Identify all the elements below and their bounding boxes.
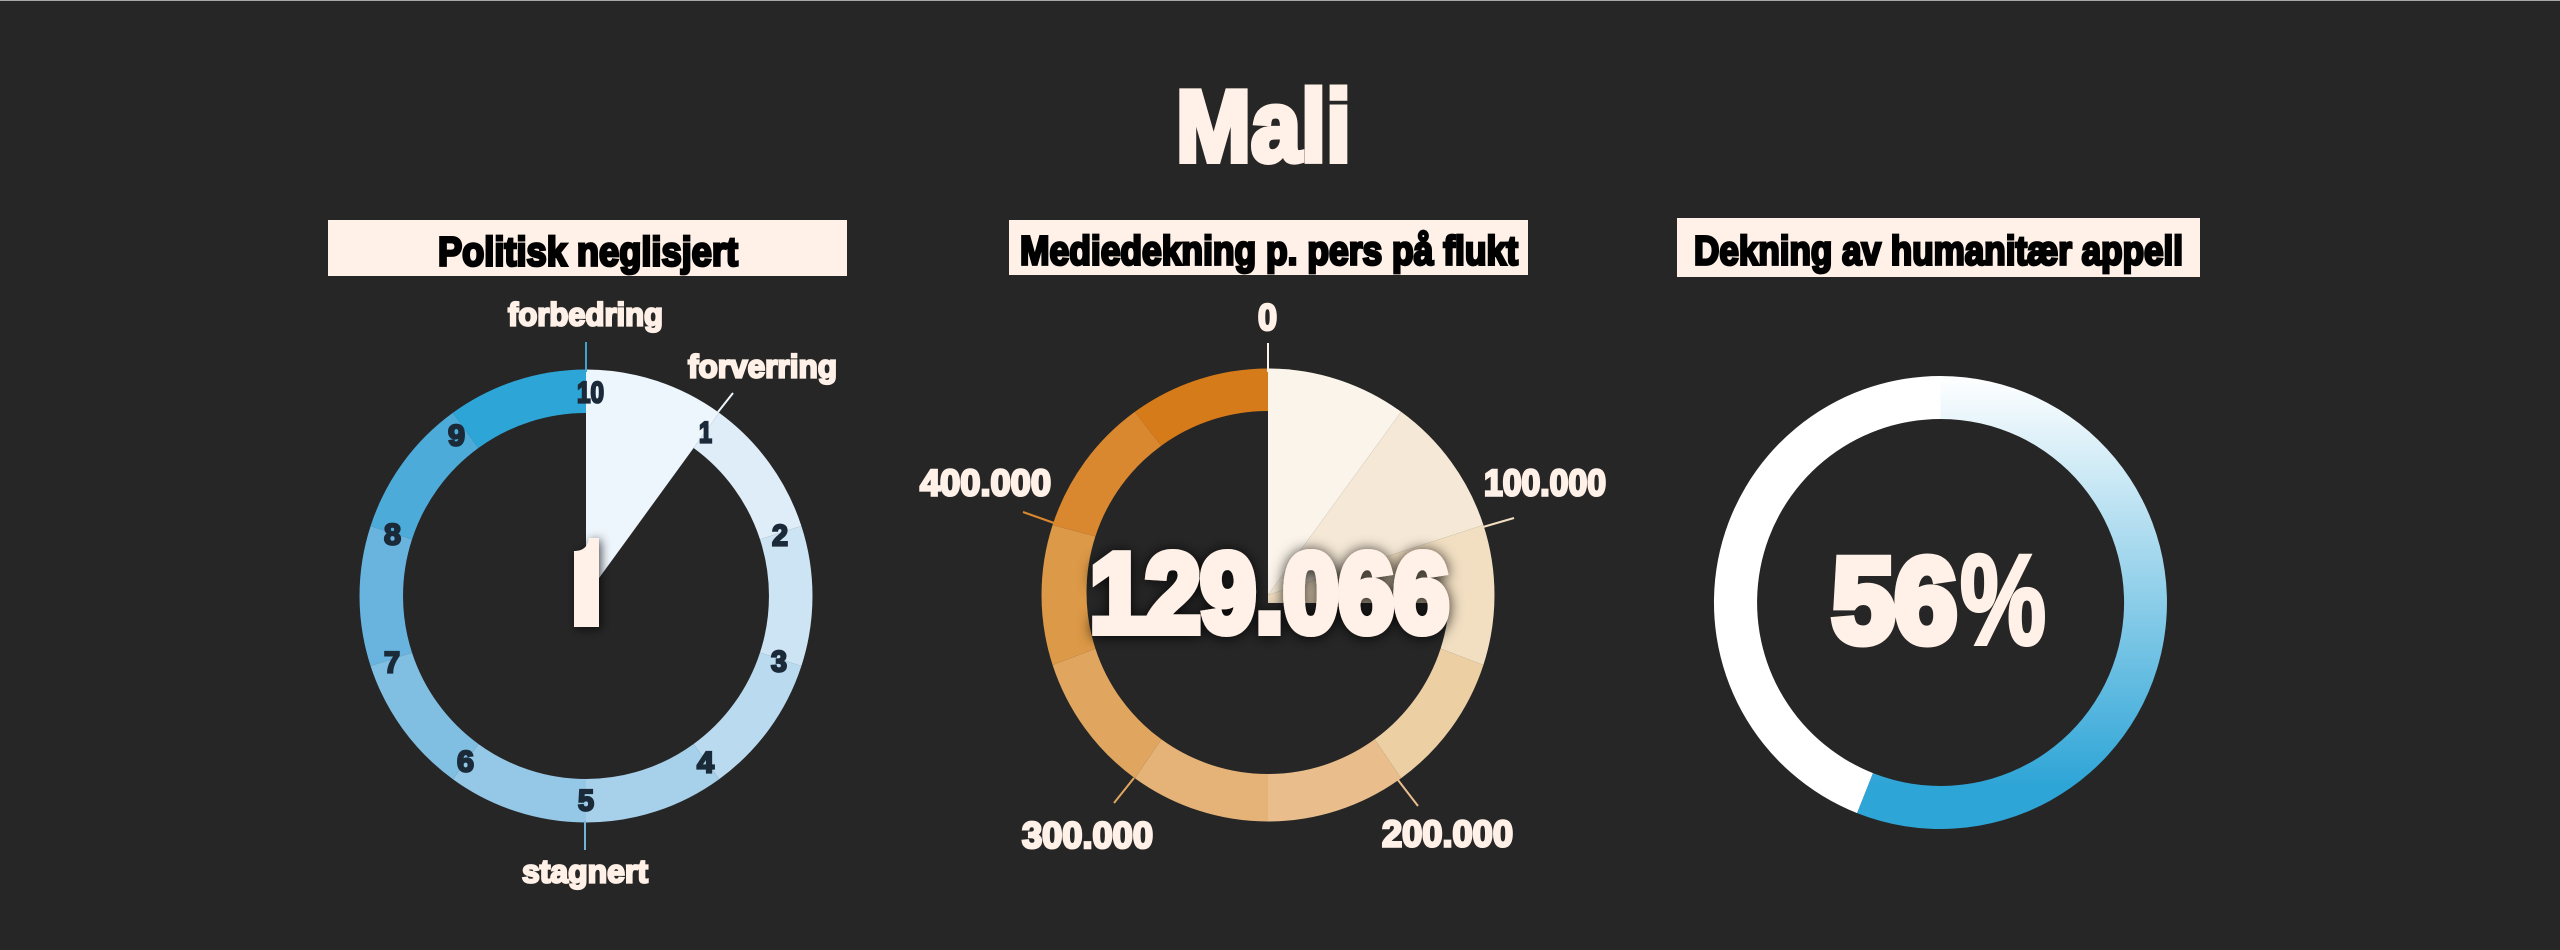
tick: 0	[1267, 343, 1269, 372]
scale numbers: 6	[457, 746, 474, 778]
label: forbedring: forbedring	[508, 296, 663, 332]
tick: stagnert	[584, 821, 586, 850]
label: 100.000: 100.000	[1484, 462, 1606, 504]
label: 200.000: 200.000	[1382, 814, 1513, 854]
scale numbers: 8	[384, 518, 401, 552]
scale numbers: 3	[771, 646, 787, 678]
heading: Politisk neglisjert	[328, 220, 847, 276]
tick: 400.000	[1023, 512, 1054, 523]
heading: Dekning av humanitær appell: Dekning av humanitær appell	[1694, 228, 2183, 274]
heading: Mediedekning p. pers på flukt: Mediedekning p. pers på flukt	[1020, 228, 1518, 274]
gauge ring: scale 1 to 10	[360, 370, 812, 822]
scale numbers: 10	[577, 376, 604, 410]
label: stagnert: stagnert	[522, 854, 648, 890]
scale numbers: 5	[578, 784, 594, 818]
label: 300.000: 300.000	[1022, 815, 1153, 856]
scale numbers: 4	[697, 746, 714, 780]
label: 400.000: 400.000	[920, 462, 1051, 504]
panel: humanitarian appeal coverage	[1677, 218, 2200, 829]
panel: political neglect: 1	[579, 535, 596, 647]
tick: 300.000	[1114, 778, 1134, 803]
scale numbers: 1	[699, 416, 712, 450]
panel: media coverage	[920, 220, 1606, 856]
scale numbers: 2	[772, 520, 788, 552]
tick: forbedring	[585, 342, 587, 372]
heading: Dekning av humanitær appell	[1677, 218, 2200, 277]
panel: political neglect	[328, 220, 847, 890]
label: forverring: forverring	[688, 348, 837, 384]
value: 1	[574, 535, 599, 647]
scale numbers: 9	[448, 420, 465, 452]
donut: funded 56%	[1857, 376, 2167, 829]
tick: 100.000	[1483, 518, 1514, 527]
tick: 200.000	[1398, 780, 1418, 806]
value: 56%: %	[1960, 529, 2046, 672]
scale numbers	[384, 376, 788, 818]
title: Mali	[1176, 71, 1351, 183]
donut: remaining share	[1714, 376, 1940, 813]
label: 0: 0	[1258, 297, 1277, 338]
tick: forverring	[718, 393, 733, 412]
value: 129.066: 129.066	[1090, 532, 1449, 656]
value: 56%: 56	[1832, 534, 1957, 668]
heading: Politisk neglisjert: Politisk neglisjert	[438, 228, 738, 274]
scale numbers: 7	[384, 646, 400, 680]
value: 56%	[1832, 529, 2046, 672]
gauge ring: scale 0 to 500.000	[1042, 368, 1494, 822]
